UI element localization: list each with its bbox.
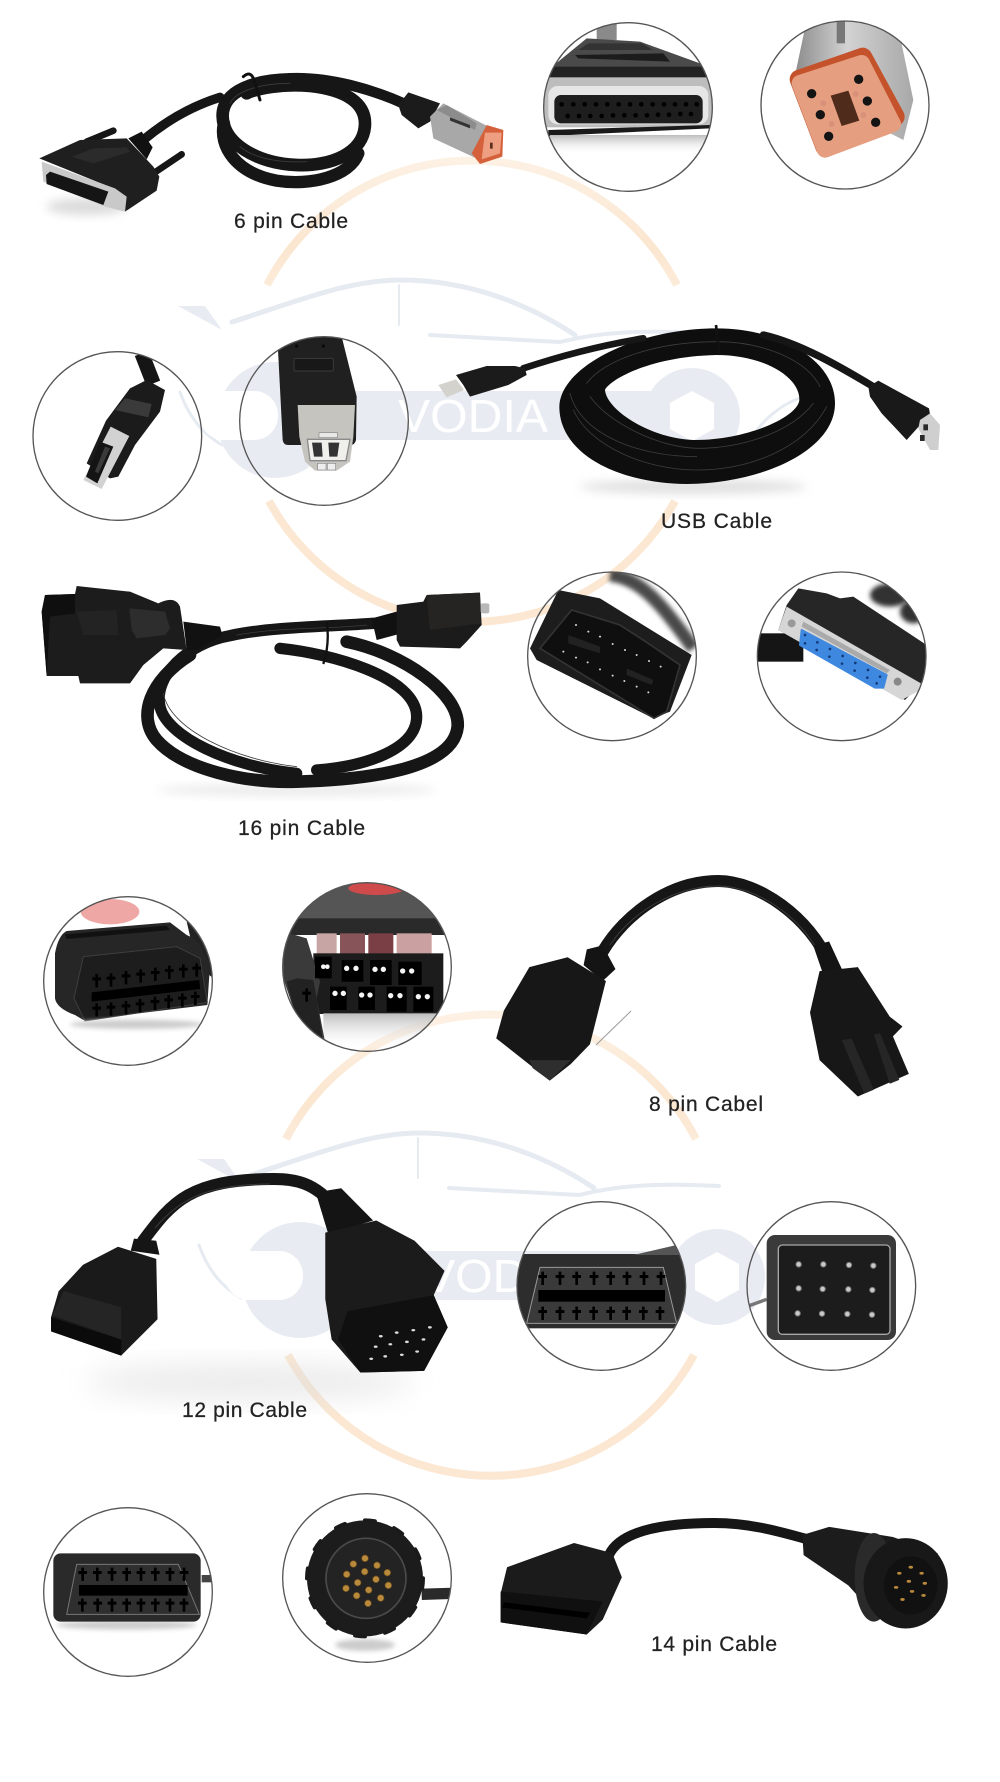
watermark: lower logo — [197, 1014, 819, 1476]
panel: 6 pin cable — [39, 20, 929, 233]
panel: 16 pin cable — [42, 572, 930, 840]
product photo: 14 pin cable — [501, 1523, 948, 1635]
detail circle: OBD socket with finger — [44, 897, 213, 1065]
detail circle: DB25 male connector — [543, 23, 713, 191]
watermark: upper logo — [178, 160, 800, 622]
detail circle: 8 pin socket — [283, 882, 453, 1051]
panel: 14 pin cable — [44, 1494, 948, 1676]
detail circle: USB A plug — [33, 352, 202, 520]
detail circle: 16 pin socket flat view — [517, 1202, 687, 1370]
product photo: 16 pin cable — [42, 586, 489, 796]
panel: USB cable — [33, 325, 940, 533]
detail circle: blue DB25 socket — [757, 572, 930, 741]
detail circle: 16 pin OBD socket — [528, 572, 696, 741]
watermark: lower logo: VODIA — [423, 1250, 573, 1302]
product photo: 8 pin cable — [496, 881, 909, 1096]
watermark: upper logo: VODIA — [398, 390, 548, 442]
label: USB Cable: USB Cable — [661, 510, 772, 533]
product photo: 12 pin cable — [51, 1179, 448, 1400]
product photo: 6 pin cable — [39, 74, 503, 215]
label: 6 pin Cable: 6 pin Cable — [234, 210, 348, 233]
panel: 8 pin cable — [44, 881, 909, 1116]
detail circle: round 14 pin plug — [283, 1494, 453, 1662]
label: 14 pin Cable: 14 pin Cable — [651, 1633, 777, 1656]
detail circle: 12 pin plug — [747, 1202, 916, 1370]
detail circle: 16 pin socket front — [44, 1508, 215, 1676]
product photo: USB cable — [438, 325, 940, 494]
panel: 12 pin cable — [51, 1179, 916, 1422]
label: 16 pin Cable: 16 pin Cable — [238, 817, 365, 840]
detail circle: orange 6 pin plug — [761, 20, 929, 189]
detail circle: USB B plug — [240, 337, 408, 505]
label: 8 pin Cabel: 8 pin Cabel — [649, 1093, 763, 1116]
label: 12 pin Cable: 12 pin Cable — [182, 1399, 307, 1422]
